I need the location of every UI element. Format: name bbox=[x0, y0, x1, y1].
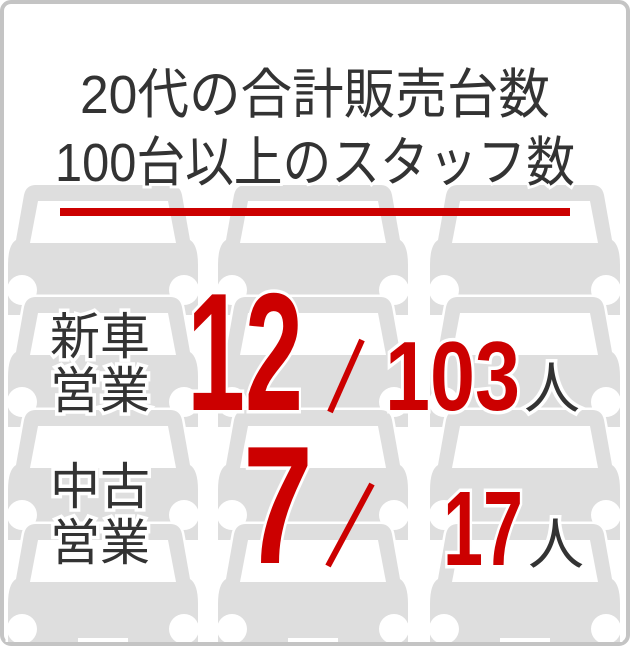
row: used car sales bbox=[50, 411, 584, 599]
background car pattern bbox=[6, 185, 622, 642]
label: 新車営業: 新車 bbox=[50, 309, 150, 365]
value 103人: 103 bbox=[385, 321, 520, 431]
red divider bbox=[60, 208, 570, 216]
title: 100台以上のスタッフ数 bbox=[55, 133, 575, 193]
title bbox=[55, 65, 575, 193]
title: 20代の合計販売台数 bbox=[80, 65, 550, 125]
value 12: 12 bbox=[187, 258, 303, 446]
slash bbox=[328, 484, 372, 566]
slash bbox=[330, 340, 362, 412]
row: used car sales: 人 bbox=[528, 513, 584, 576]
row: new car sales bbox=[50, 258, 580, 446]
label: 新車営業: 営業 bbox=[50, 363, 150, 419]
value 7: 7 bbox=[243, 411, 313, 599]
label: 中古営業 bbox=[50, 459, 150, 571]
row: new car sales: 人 bbox=[524, 357, 580, 420]
label: 中古営業: 中古 bbox=[50, 459, 150, 515]
label: 新車営業 bbox=[50, 309, 150, 419]
value 17人: 17 bbox=[443, 470, 523, 588]
label: 中古営業: 営業 bbox=[50, 515, 150, 571]
